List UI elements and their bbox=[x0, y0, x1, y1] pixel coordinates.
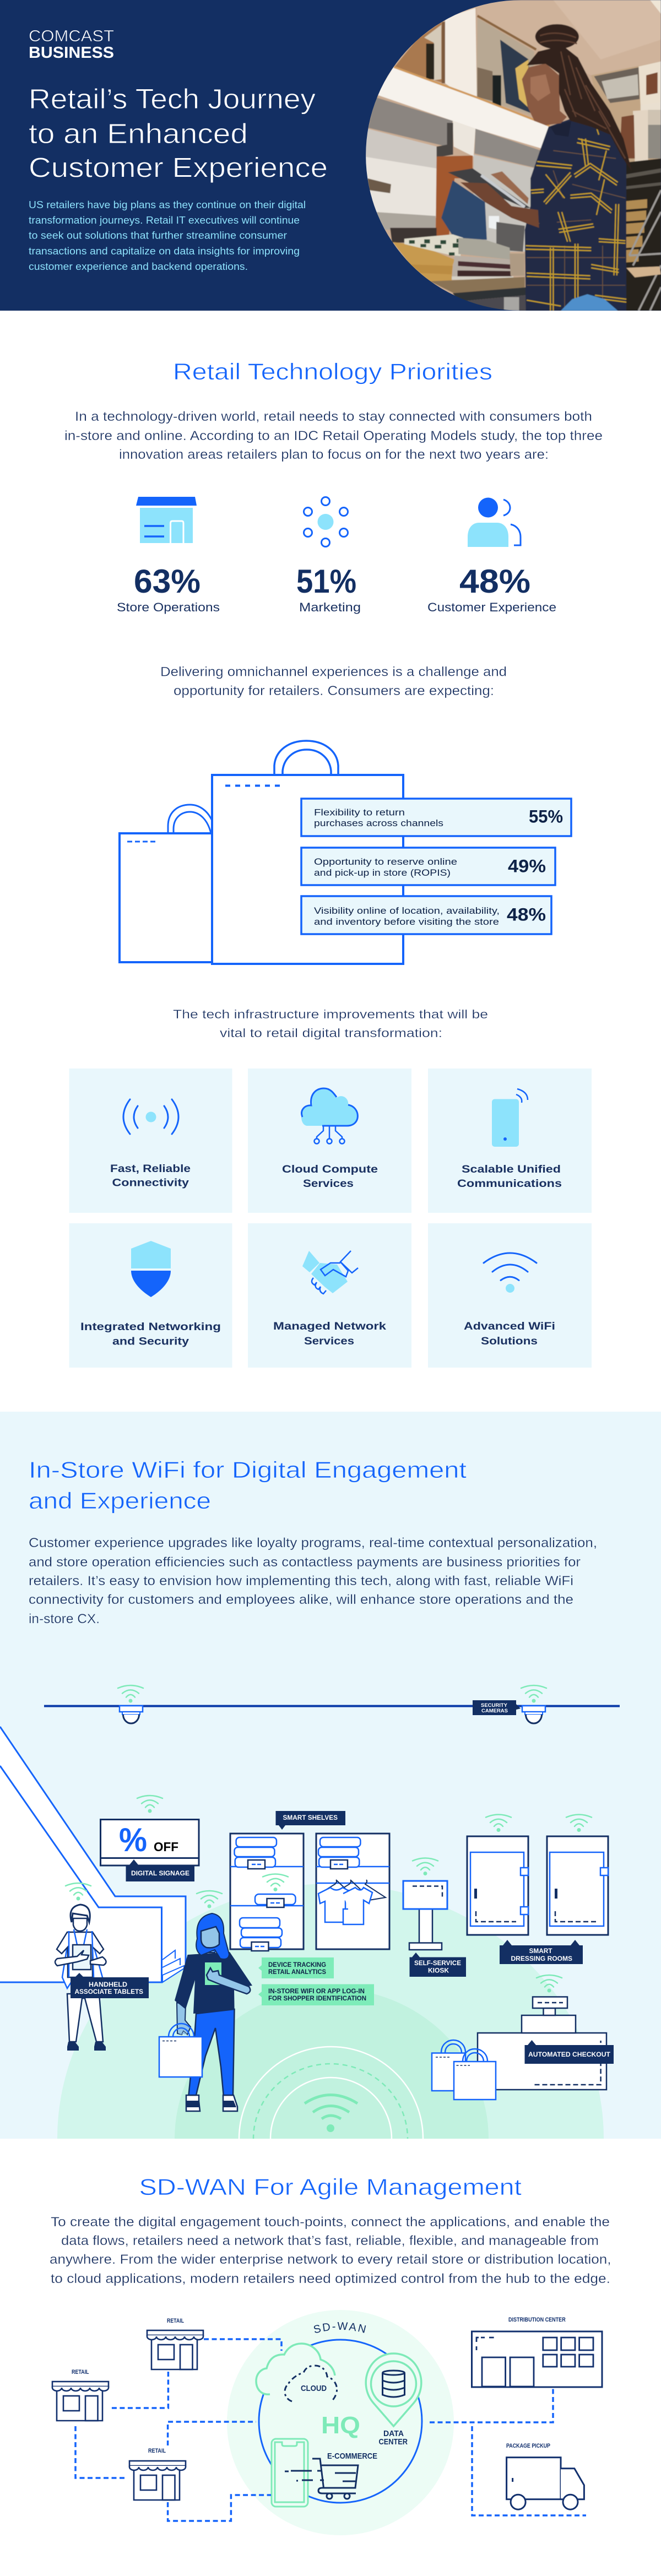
callout: flexibility to return 55%: Flexibility to return bbox=[314, 807, 405, 817]
wifi section paragraph: connectivity for customers and employees alike, will enhance store operations and the bbox=[29, 1592, 573, 1607]
icon: wifi bbox=[484, 1253, 537, 1293]
callout: reserve online 49% bbox=[301, 848, 555, 885]
sweaters and table bbox=[393, 242, 454, 281]
dressing room two bbox=[547, 1814, 608, 1935]
omnichannel intro text: opportunity for retailers. Consumers are expecting: bbox=[174, 684, 494, 698]
smart shelves unit right bbox=[316, 1834, 389, 1949]
label: self-service kiosk: SELF-SERVICE bbox=[414, 1960, 461, 1967]
card: managed network services bbox=[248, 1223, 411, 1368]
heading: SD-WAN For Agile Management bbox=[139, 2174, 522, 2200]
card: fast reliable connectivity: Fast, Reliable bbox=[110, 1163, 191, 1175]
package pickup truck bbox=[506, 2443, 584, 2509]
shopping bags at checkout bbox=[432, 2040, 496, 2100]
face and hair bbox=[535, 24, 579, 49]
label: handheld associate tablets: ASSOCIATE TABLETS bbox=[75, 1989, 143, 1995]
infrastructure intro text: vital to retail digital transformation: bbox=[220, 1026, 442, 1040]
header photo: retail worker with tablet bbox=[364, 0, 661, 311]
ceiling with security cameras bbox=[44, 1685, 620, 1723]
cloud bbox=[256, 2344, 337, 2401]
curved label: sd-wan bbox=[314, 2322, 366, 2333]
heading: Retail Technology Priorities bbox=[173, 359, 492, 384]
dashed network links bbox=[75, 2339, 586, 2521]
hq label: HQ bbox=[321, 2412, 360, 2439]
sd-wan hub diagram bbox=[227, 2310, 454, 2535]
title: to an Enhanced bbox=[29, 118, 248, 149]
automated checkout bbox=[432, 1975, 614, 2100]
cloud: CLOUD bbox=[301, 2384, 327, 2393]
retail store left: RETAIL bbox=[72, 2369, 89, 2376]
card: cloud compute services bbox=[248, 1069, 411, 1213]
callout: reserve online 49%: Opportunity to reserve online bbox=[314, 856, 457, 867]
card: managed network services: Managed Network bbox=[273, 1320, 386, 1332]
section: sd-wan bbox=[50, 2174, 611, 2535]
label: digital signage: DIGITAL SIGNAGE bbox=[131, 1870, 189, 1877]
digital signage: % bbox=[119, 1821, 147, 1858]
icon: shield bbox=[131, 1241, 171, 1297]
infrastructure intro text: The tech infrastructure improvements that will be bbox=[173, 1007, 488, 1021]
icon: store bbox=[136, 497, 197, 543]
card: fast reliable connectivity bbox=[69, 1069, 232, 1213]
heading: and Experience bbox=[29, 1488, 211, 1514]
card: scalable unified communications bbox=[428, 1069, 592, 1213]
label: in-store wifi or app log-in: IN-STORE WIFI OR APP LOG-IN bbox=[268, 1988, 365, 1995]
card: integrated networking and security: Integrated Networking bbox=[80, 1321, 221, 1333]
label: smart shelves: SMART SHELVES bbox=[283, 1815, 338, 1821]
card: managed network services: Services bbox=[304, 1335, 354, 1347]
callout: flexibility to return 55%: purchases across channels bbox=[314, 818, 443, 828]
stat: store operations: 63% bbox=[134, 563, 201, 600]
store floor coverage rings bbox=[57, 1884, 604, 2139]
section: tech infrastructure improvements bbox=[69, 1007, 592, 1368]
section: in-store wifi bbox=[0, 1412, 661, 2139]
card: integrated networking and security: and Security bbox=[112, 1335, 189, 1347]
card: advanced wifi solutions: Advanced WiFi bbox=[464, 1320, 555, 1332]
stat: customer experience bbox=[427, 563, 556, 614]
figure: store associate with tablet bbox=[55, 1883, 149, 2051]
hands and tablet bbox=[491, 171, 529, 204]
stat: marketing: 51% bbox=[296, 563, 356, 600]
priorities intro text: in-store and online. According to an IDC Retail Operating Models study, the top three bbox=[64, 429, 603, 443]
distribution center bbox=[472, 2317, 602, 2387]
retail store top bbox=[147, 2318, 203, 2369]
label: self-service kiosk: KIOSK bbox=[428, 1967, 449, 1974]
sd-wan paragraph: anywhere. From the wider enterprise network to every retail store or distribution location, bbox=[50, 2252, 611, 2267]
priorities intro text bbox=[64, 409, 603, 462]
label: security cameras: CAMERAS bbox=[481, 1708, 508, 1713]
label: device tracking retail analytics: RETAIL ANALYTICS bbox=[268, 1969, 326, 1976]
shopper bag bbox=[159, 2024, 202, 2077]
logo: BUSINESS bbox=[29, 44, 114, 62]
icon: database bbox=[382, 2371, 404, 2397]
card: scalable unified communications: Communications bbox=[457, 1178, 562, 1190]
icon: signal broadcast bbox=[123, 1099, 178, 1134]
smart dressing rooms bbox=[467, 1814, 608, 1964]
label: automated checkout bbox=[524, 2040, 614, 2064]
title: Retail’s Tech Journey bbox=[29, 83, 316, 115]
callout: reserve online 49%: 49% bbox=[508, 856, 546, 876]
phone bbox=[272, 2439, 308, 2507]
card: advanced wifi solutions bbox=[428, 1223, 592, 1368]
callout: flexibility to return 55%: 55% bbox=[529, 806, 563, 826]
wifi section paragraph: and store operation efficiencies such as contactless payments are business priorities for bbox=[29, 1555, 581, 1570]
label: handheld associate tablets: HANDHELD bbox=[89, 1982, 127, 1988]
icon: smartphone bbox=[492, 1089, 528, 1147]
store entrance walls bbox=[0, 1727, 186, 1982]
heading: In-Store WiFi for Digital Engagement bbox=[29, 1457, 467, 1483]
icon: cloud bbox=[301, 1088, 358, 1143]
callout: visibility online 48%: and inventory before visiting the store bbox=[314, 916, 499, 927]
stat: customer experience: 48% bbox=[459, 563, 530, 600]
card: scalable unified communications: Scalable Unified bbox=[462, 1163, 561, 1175]
omnichannel intro text: Delivering omnichannel experiences is a challenge and bbox=[160, 664, 507, 680]
icon: large shopping bag bbox=[212, 741, 403, 964]
stat: customer experience: Customer Experience bbox=[427, 600, 556, 614]
icon: marketing network bbox=[304, 497, 348, 546]
data center pin bbox=[366, 2353, 421, 2447]
smart shelves unit left bbox=[230, 1834, 304, 1951]
priorities intro text: innovation areas retailers plan to focus on for the next two years are: bbox=[119, 447, 549, 462]
intro paragraph: to seek out solutions that further streamline consumer bbox=[29, 229, 287, 241]
wifi section paragraph: in-store CX. bbox=[29, 1612, 100, 1626]
wifi section paragraph: Customer experience upgrades like loyalty programs, real-time contextual personalization, bbox=[29, 1536, 597, 1550]
shirt bbox=[525, 119, 626, 311]
label: in-store wifi or app log-in bbox=[258, 1984, 374, 2005]
callout: visibility online 48% bbox=[301, 896, 551, 934]
priorities intro text: In a technology-driven world, retail needs to stay connected with consumers both bbox=[75, 409, 592, 424]
entrance steps bbox=[162, 1950, 184, 1982]
card: cloud compute services: Cloud Compute bbox=[282, 1163, 378, 1175]
hangers and shirts bbox=[318, 1880, 386, 1924]
omnichannel intro text bbox=[160, 664, 507, 698]
retail store bottom: RETAIL bbox=[148, 2448, 166, 2454]
section: omnichannel expectations bbox=[120, 664, 571, 964]
sd-wan paragraph bbox=[50, 2215, 611, 2286]
label: digital signage bbox=[126, 1859, 194, 1881]
stat: marketing: Marketing bbox=[299, 600, 361, 614]
card: cloud compute services: Services bbox=[303, 1178, 354, 1190]
card: fast reliable connectivity: Connectivity bbox=[112, 1176, 189, 1189]
logo bbox=[29, 28, 114, 62]
callout: flexibility to return 55% bbox=[301, 799, 571, 836]
icon: customer bbox=[468, 498, 521, 547]
sd-wan paragraph: To create the digital engagement touch-points, connect the applications, and enable the bbox=[51, 2215, 610, 2230]
sd-wan paragraph: to cloud applications, modern retailers need optimized control from the hub to the edge. bbox=[51, 2271, 610, 2286]
package pickup truck: PACKAGE PICKUP bbox=[506, 2443, 550, 2449]
intro paragraph: transactions and capitalize on data insights for improving bbox=[29, 245, 300, 257]
header band bbox=[0, 0, 661, 311]
title bbox=[29, 83, 328, 183]
digital signage bbox=[100, 1796, 199, 1881]
callout: visibility online 48%: 48% bbox=[507, 904, 546, 924]
label: handheld associate tablets bbox=[71, 1973, 149, 1998]
distribution center: DISTRIBUTION CENTER bbox=[508, 2317, 566, 2323]
label: smart dressing rooms: SMART bbox=[529, 1948, 552, 1955]
figure: shopper with bag and phone bbox=[159, 1891, 252, 2111]
label: security cameras: SECURITY bbox=[481, 1702, 507, 1708]
infrastructure intro text bbox=[173, 1007, 488, 1040]
self-service kiosk bbox=[403, 1858, 466, 1977]
label: smart shelves bbox=[275, 1811, 345, 1830]
retail store bottom bbox=[129, 2448, 186, 2500]
intro paragraph: customer experience and backend operations. bbox=[29, 261, 248, 272]
icon: handshake bbox=[302, 1251, 358, 1294]
wifi section paragraph: retailers. It’s easy to envision how implementing this tech, along with fast, reliable WiFi bbox=[29, 1574, 573, 1588]
camera right bbox=[521, 1685, 546, 1723]
e-commerce label: E-COMMERCE bbox=[327, 2452, 377, 2461]
retail store left bbox=[52, 2369, 109, 2421]
callout: visibility online 48%: Visibility online of location, availability, bbox=[314, 905, 500, 916]
wifi section paragraph bbox=[29, 1536, 597, 1626]
intro paragraph: US retailers have big plans as they continue on their digital bbox=[29, 199, 306, 210]
label: smart dressing rooms: DRESSING ROOMS bbox=[511, 1956, 572, 1962]
stat: store operations: Store Operations bbox=[117, 600, 220, 614]
curved label: sd-wan: SD-WAN bbox=[314, 2322, 366, 2333]
data center pin: CENTER bbox=[379, 2437, 408, 2447]
data center pin: DATA bbox=[383, 2429, 404, 2438]
intro paragraph: transformation journeys. Retail IT executives will continue bbox=[29, 214, 300, 226]
sd-wan paragraph: data flows, retailers need a network that’s fast, reliable, flexible, and manageable from bbox=[61, 2233, 599, 2248]
label: security cameras bbox=[473, 1700, 521, 1715]
title: Customer Experience bbox=[29, 152, 328, 183]
retail store top: RETAIL bbox=[167, 2318, 184, 2324]
icon: small shopping bag bbox=[120, 805, 212, 962]
section: retail technology priorities bbox=[64, 359, 603, 614]
label: device tracking retail analytics bbox=[258, 1957, 334, 1978]
label: self-service kiosk bbox=[410, 1953, 466, 1977]
dressing room one bbox=[467, 1814, 528, 1935]
right background bbox=[592, 66, 656, 162]
stat: store operations bbox=[117, 563, 220, 614]
label: automated checkout: AUTOMATED CHECKOUT bbox=[528, 2052, 610, 2058]
digital signage: OFF bbox=[154, 1840, 178, 1854]
intro paragraph bbox=[29, 199, 306, 272]
card: integrated networking and security bbox=[69, 1223, 232, 1368]
logo: COMCAST bbox=[29, 28, 114, 45]
heading bbox=[29, 1457, 467, 1514]
icon: e-commerce cart bbox=[285, 2459, 358, 2499]
callout: reserve online 49%: and pick-up in store (ROPIS) bbox=[314, 867, 451, 878]
icon: central wifi signal bbox=[305, 2095, 357, 2132]
camera left bbox=[118, 1685, 143, 1723]
card: advanced wifi solutions: Solutions bbox=[481, 1335, 538, 1347]
label: device tracking retail analytics: DEVICE TRACKING bbox=[268, 1962, 326, 1968]
label: in-store wifi or app log-in: FOR SHOPPER IDENTIFICATION bbox=[268, 1995, 366, 2002]
label: smart dressing rooms bbox=[500, 1940, 583, 1964]
